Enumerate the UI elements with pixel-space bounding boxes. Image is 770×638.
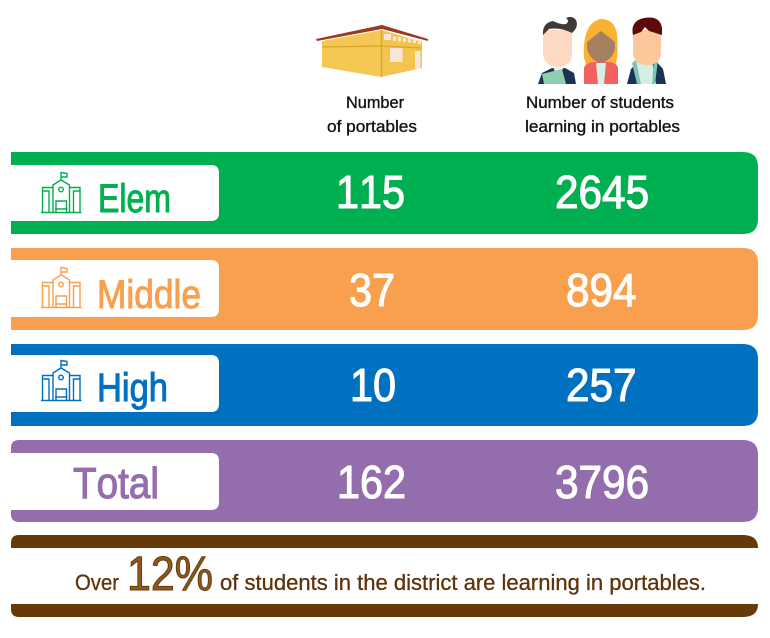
- panel: summary callout: [11, 535, 758, 617]
- student 2: [584, 19, 618, 84]
- panel: elementary row: [11, 152, 758, 234]
- panel: middle row: 37: [349, 265, 395, 317]
- panel: summary callout: Over: [75, 570, 119, 595]
- student 3: [627, 17, 666, 84]
- heading: number of students: [525, 93, 680, 136]
- panel: middle row: [11, 248, 758, 330]
- icon: three students: [538, 17, 666, 84]
- icon: portable classroom building: [316, 25, 428, 77]
- panel: elementary row: Elem: [98, 177, 171, 221]
- panel: middle row: 894: [566, 265, 637, 316]
- panel: middle row: Middle: [97, 273, 201, 317]
- panel: summary callout: of students in the district are learning in portables.: [220, 570, 706, 595]
- panel: total row: Total: [73, 459, 159, 508]
- heading: number of portables: of portables: [327, 117, 417, 136]
- panel: high row: 10: [350, 360, 396, 412]
- heading: number of students: learning in portables: [525, 117, 680, 136]
- panel: high row: [11, 344, 758, 426]
- panel: total row: 3796: [555, 457, 649, 508]
- heading: number of portables: [327, 93, 417, 136]
- heading: number of portables: Number: [346, 93, 404, 112]
- panel: summary callout: 12%: [127, 548, 213, 601]
- panel: high row: 257: [566, 360, 637, 411]
- panel: total row: [11, 440, 758, 522]
- panel: elementary row: 2645: [555, 167, 649, 218]
- student 1: [538, 17, 577, 84]
- panel: elementary row: 115: [336, 167, 405, 219]
- panel: high row: High: [97, 366, 168, 410]
- heading: number of students: Number of students: [526, 93, 674, 112]
- panel: total row: 162: [337, 457, 406, 509]
